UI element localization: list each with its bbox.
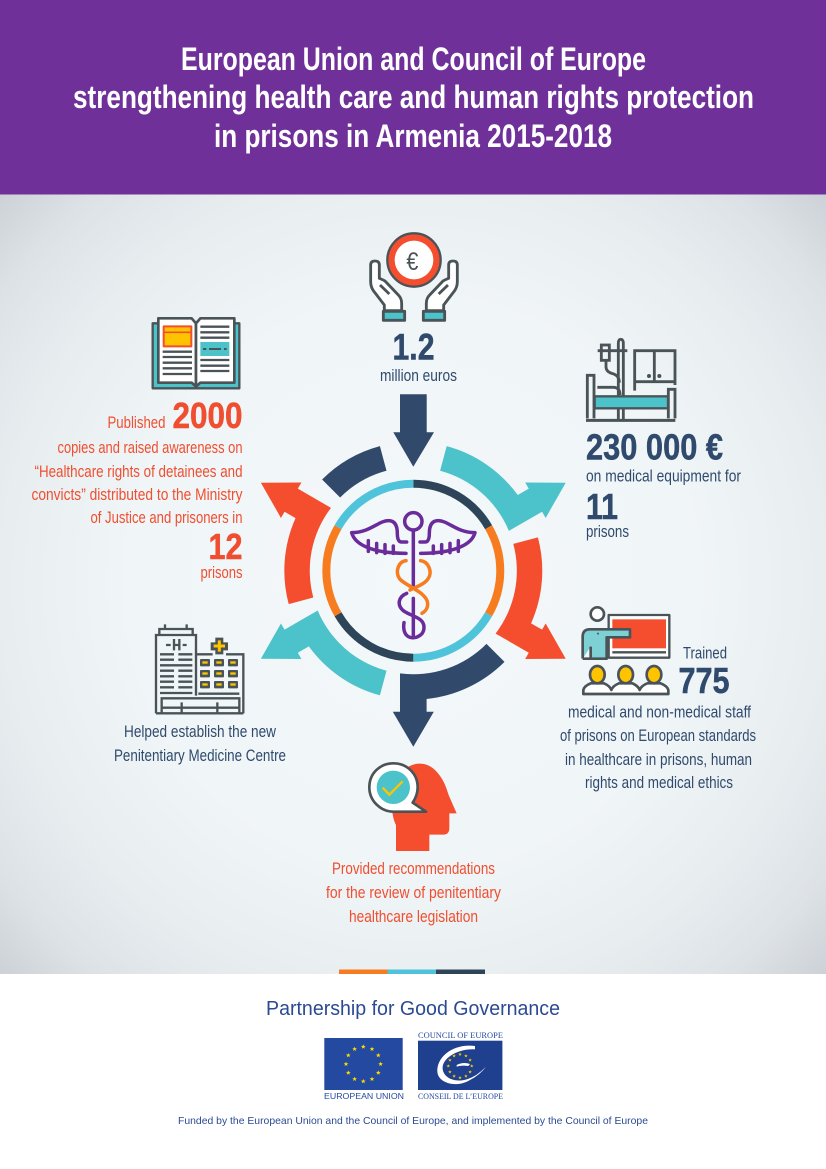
text: 2000: [172, 395, 242, 436]
icon: hospital bed and cabinet: [586, 339, 675, 420]
icon: open book: [153, 318, 239, 388]
number: 1.2: [392, 326, 434, 368]
text: copies and raised awareness on: [58, 438, 242, 457]
header band: [0, 0, 826, 194]
partnership heading: Partnership for Good Governance: [266, 998, 560, 1020]
title: [73, 41, 754, 154]
block: funding 1.2 million euros: [371, 233, 457, 385]
arrow: red upper left: [215, 465, 360, 613]
text: in healthcare in prisons, human: [565, 750, 752, 769]
block: medical equipment: [586, 339, 741, 541]
text: Provided recommendations: [332, 859, 495, 878]
text: Penitentiary Medicine Centre: [114, 746, 286, 765]
arrow: teal lower left: [251, 590, 396, 738]
text: [560, 644, 756, 792]
arrow: red lower right: [466, 528, 611, 676]
text: Published: [108, 413, 166, 432]
footer: [178, 998, 648, 1127]
block: penitentiary medicine centre: [114, 624, 286, 765]
text: of Justice and prisoners in: [90, 508, 242, 527]
icon: head with speech bubble: [369, 763, 457, 851]
block: trained staff: [560, 607, 756, 792]
text: 775: [678, 660, 730, 701]
text: prisons: [200, 563, 242, 582]
text: [114, 722, 286, 765]
logo: European Union: [324, 1038, 404, 1101]
text: convicts” distributed to the Ministry: [32, 485, 243, 504]
caption: million euros: [380, 366, 457, 385]
text: healthcare legislation: [349, 907, 478, 926]
logo: Council of Europe: COUNCIL OF EUROPE: [418, 1030, 503, 1040]
caption: on medical equipment for: [586, 466, 741, 486]
icon: caduceus: [352, 513, 475, 638]
title: in prisons in Armenia 2015-2018: [214, 118, 612, 154]
arrow: teal upper right: [431, 404, 576, 552]
text: 12: [208, 526, 242, 567]
text: of prisons on European standards: [560, 726, 756, 745]
icon: trainer and audience: [583, 607, 669, 694]
text: Trained: [683, 644, 727, 662]
text: rights and medical ethics: [585, 773, 733, 792]
text: “Healthcare rights of detainees and: [34, 462, 242, 481]
arrow: funding into cycle: [393, 394, 434, 467]
colour accent bar: [339, 970, 485, 974]
logo: Council of Europe: CONSEIL DE L’EUROPE: [418, 1091, 503, 1101]
caption: prisons: [586, 522, 629, 541]
arrow: navy bottom: [393, 644, 504, 747]
arc: navy top-left: [322, 446, 386, 498]
icon: hands holding euro coin: [371, 233, 457, 320]
inner ring: [326, 484, 500, 658]
text: for the review of penitentiary: [326, 883, 501, 902]
icon: hospital building: [156, 624, 243, 713]
logo: European Union: EUROPEAN UNION: [324, 1091, 404, 1101]
text: [32, 395, 243, 582]
block: recommendations: [326, 763, 501, 926]
funding note: Funded by the European Union and the Council of Europe, and implemented by the Council of Europe: [178, 1115, 648, 1127]
background panel: [0, 194, 826, 974]
number: 11: [586, 486, 618, 527]
text: Helped establish the new: [124, 722, 277, 741]
block: published copies: [32, 318, 243, 582]
central cycle diagram: [215, 394, 611, 747]
title: European Union and Council of Europe: [181, 41, 646, 77]
icon: hands holding euro coin: €: [406, 248, 418, 276]
logo: Council of Europe: [418, 1030, 503, 1101]
text: [326, 859, 501, 926]
amount: 230 000 €: [586, 426, 723, 468]
outer arrows ring: [215, 404, 611, 747]
text: medical and non-medical staff: [568, 702, 751, 722]
